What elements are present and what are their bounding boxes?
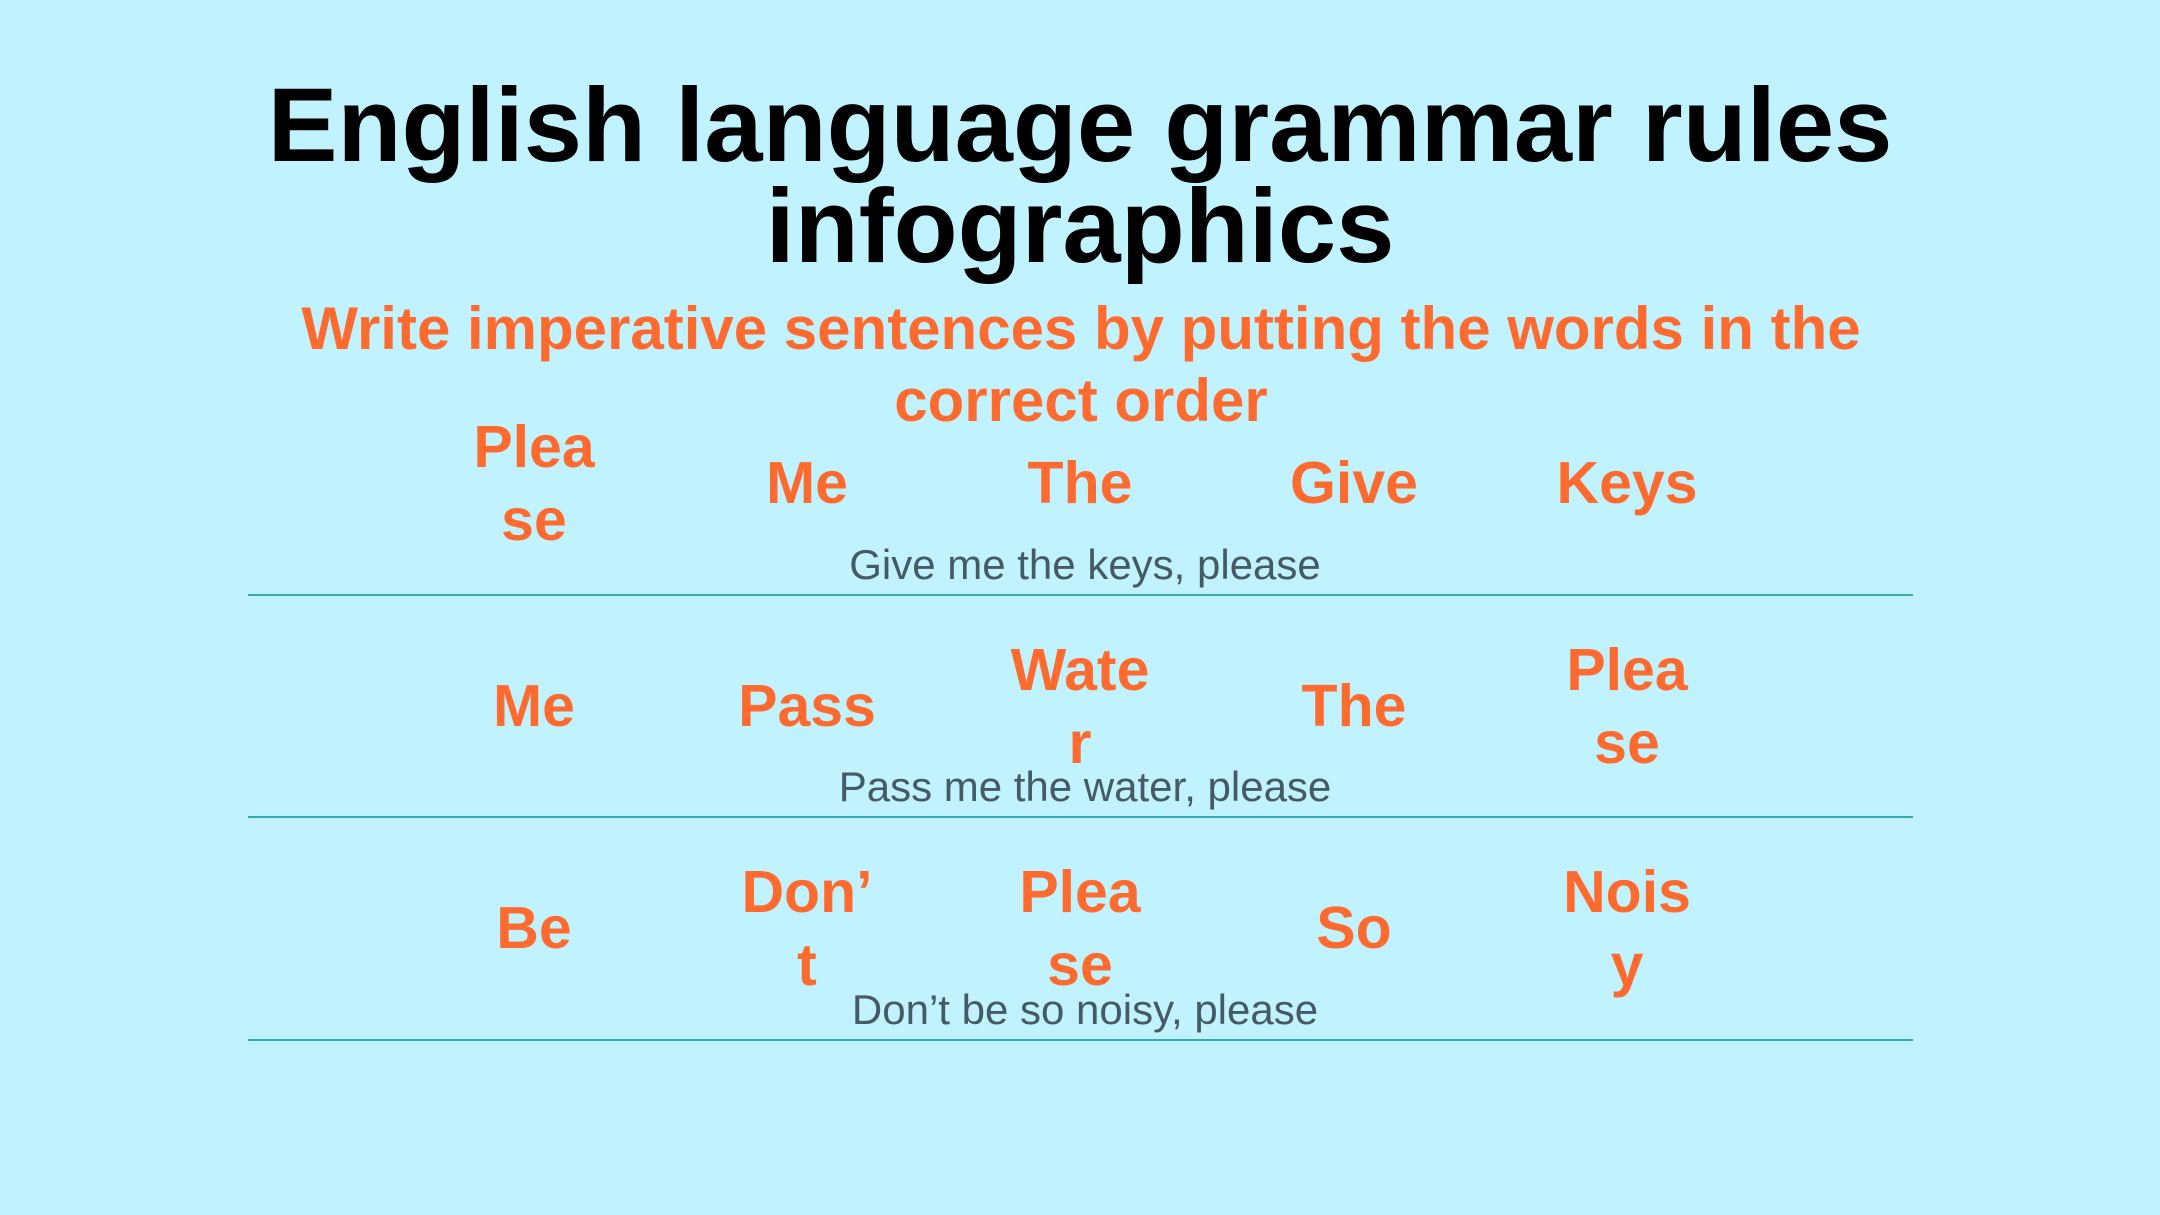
word: Be (row 3): Be [496,895,572,961]
word: Don't (row 3): Don’ [741,859,873,925]
word: Me (row 1): Me [766,450,848,516]
word: Don't (row 3): t [797,932,817,998]
word: So (row 3): So [1316,895,1392,961]
answer: row 2: Pass me the water, please [839,763,1331,810]
answer: row 3: Don’t be so noisy, please [852,986,1318,1033]
word: Noisy (row 3) [1563,859,1691,998]
subtitle: correct order [894,367,1268,434]
title: English language grammar rules [268,67,1892,184]
word: Please (row 1) [473,414,596,552]
word: Please (row 2): Plea [1566,637,1688,703]
word: Please (row 2): se [1594,710,1660,776]
title [268,67,1892,284]
word: Water (row 2): r [1069,710,1091,776]
word: The (row 2): The [1302,673,1406,739]
word: Please (row 3) [1019,859,1142,998]
subtitle: Write imperative sentences by putting the words in the [301,295,1861,362]
word: Noisy (row 3): y [1611,932,1643,998]
word: Keys (row 1): Keys [1556,450,1698,516]
answer: row 1: Give me the keys, please [849,541,1321,588]
word: Noisy (row 3): Nois [1563,859,1691,925]
word: Water (row 2): Wate [1011,637,1149,703]
subtitle [301,295,1861,434]
word: Water (row 2) [1010,637,1149,776]
word: Please (row 2) [1566,637,1688,776]
word: Please (row 1): se [501,486,567,552]
word: Please (row 3): se [1047,932,1113,998]
divider: row 2 [248,816,1913,818]
word: Please (row 1): Plea [473,414,595,480]
divider: row 1 [248,594,1913,596]
word: Give (row 1): Give [1290,450,1418,516]
word: Don't (row 3) [741,859,873,998]
divider: row 3 [248,1039,1913,1041]
title: infographics [766,168,1394,284]
word: Me (row 2): Me [493,673,575,739]
word: The (row 1): The [1028,450,1132,516]
word: Please (row 3): Plea [1019,859,1141,925]
word: Pass (row 2): Pass [738,673,876,739]
